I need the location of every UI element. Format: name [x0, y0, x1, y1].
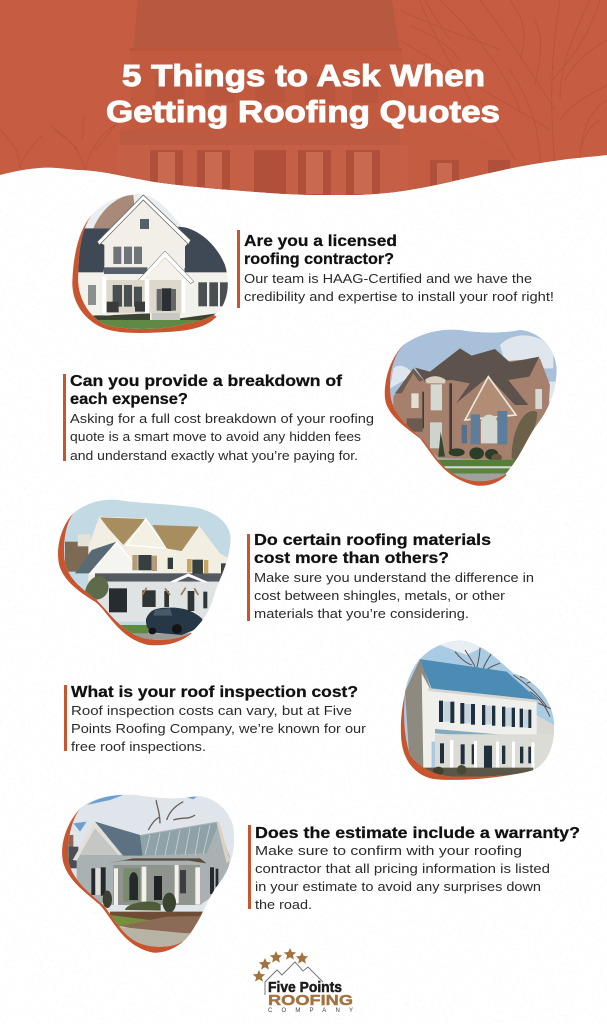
- photo blob 4: blue metal roof house: [400, 640, 554, 780]
- body 1: [244, 271, 554, 304]
- body 4: Points Roofing Company, we’re known for our: [71, 721, 367, 736]
- company logo: [253, 948, 353, 1014]
- body 1: credibility and expertise to install your roof right!: [244, 289, 554, 304]
- body 4: free roof inspections.: [71, 739, 206, 754]
- heading 1: [244, 233, 397, 268]
- logo mountains: [265, 962, 323, 995]
- question 5: [248, 825, 580, 912]
- photo blob 1: white farmhouse: [72, 194, 228, 333]
- question 1: [237, 230, 554, 308]
- body 3: materials that you’re considering.: [254, 606, 469, 621]
- photo blob 2: brick house: [380, 325, 560, 490]
- heading 2: Can you provide a breakdown of: [70, 373, 343, 390]
- body 2: Asking for a full cost breakdown of your roofing: [70, 411, 374, 426]
- logo wordmark: [268, 979, 353, 1014]
- body 1: Our team is HAAG-Certified and we have the: [244, 271, 532, 286]
- title: 5 Things to Ask When: [122, 58, 485, 93]
- heading 3: [254, 532, 491, 567]
- photo blob 3: white house with car: [55, 495, 235, 647]
- heading 1: Are you a licensed: [244, 233, 397, 250]
- heading 2: [70, 373, 343, 408]
- question 2: [63, 373, 374, 463]
- heading 4: What is your roof inspection cost?: [71, 684, 358, 701]
- title: Getting Roofing Quotes: [106, 94, 500, 129]
- heading 3: cost more than others?: [254, 550, 449, 567]
- logo stars: [253, 948, 308, 982]
- photo blob 5: grey cottage: [60, 790, 240, 955]
- logo wordmark: COMPANY: [268, 1008, 353, 1014]
- question 3: [247, 532, 534, 621]
- body 5: [255, 843, 550, 912]
- heading 2: each expense?: [70, 391, 188, 408]
- body 3: cost between shingles, metals, or other: [254, 588, 506, 603]
- body 5: contractor that all pricing information is listed: [255, 861, 550, 876]
- heading 3: Do certain roofing materials: [254, 532, 491, 549]
- header trees: [0, 0, 607, 170]
- body 3: [254, 570, 534, 621]
- body 3: Make sure you understand the difference in: [254, 570, 534, 585]
- body 4: [71, 703, 367, 754]
- body 2: and understand exactly what you’re paying for.: [70, 448, 358, 463]
- body 5: Make sure to confirm with your roofing: [255, 843, 522, 858]
- logo wordmark: ROOFING: [268, 992, 353, 1009]
- header house: [118, 0, 530, 200]
- title: [106, 58, 500, 129]
- header banner with house photo: [0, 0, 607, 200]
- body 2: [70, 411, 374, 463]
- body 5: the road.: [255, 897, 312, 912]
- body 5: in your estimate to avoid any surprises down: [255, 879, 541, 894]
- heading 1: roofing contractor?: [244, 251, 394, 268]
- body 2: quote is a smart move to avoid any hidden fees: [70, 429, 361, 444]
- logo wordmark: Five Points: [268, 979, 342, 996]
- heading 5: Does the estimate include a warranty?: [255, 825, 580, 842]
- body 4: Roof inspection costs can vary, but at Five: [71, 703, 352, 718]
- question 4: [64, 684, 367, 754]
